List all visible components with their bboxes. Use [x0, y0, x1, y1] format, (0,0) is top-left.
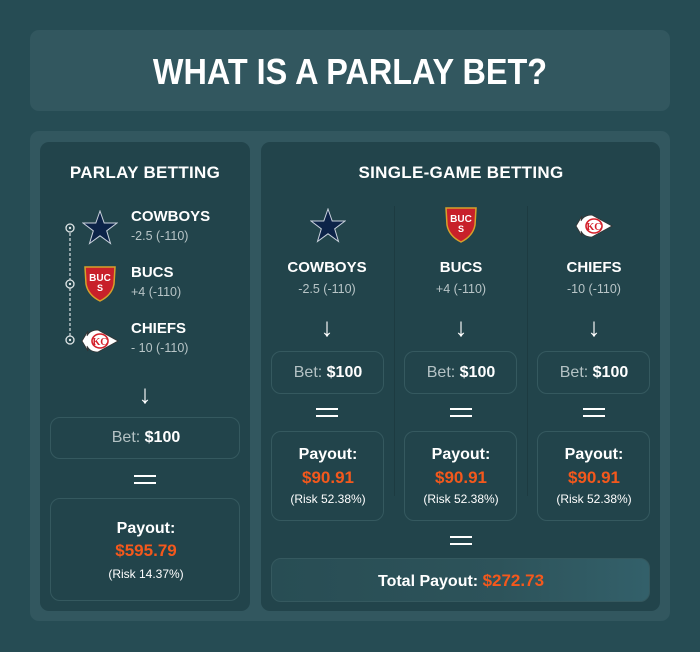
heading: single-game betting: SINGLE-GAME BETTING — [359, 163, 563, 182]
container — [30, 131, 670, 621]
column: bucs: +4 (-110) — [436, 282, 486, 296]
column: bucs: (Risk 52.38%) — [423, 492, 499, 506]
heading: parlay betting: PARLAY BETTING — [70, 163, 220, 182]
title banner — [30, 30, 670, 111]
equals — [450, 536, 472, 545]
icon: chiefs: KC — [586, 222, 602, 233]
text: bucs: +4 (-110) — [131, 285, 181, 299]
column: cowboys: COWBOYS — [287, 259, 367, 276]
payout box: (Risk 14.37%) — [108, 567, 184, 581]
column: chiefs: Bet: $100 — [560, 364, 628, 381]
bet box: Bet: $100 — [112, 429, 180, 446]
column: bucs: ↓ — [454, 312, 468, 342]
icon: chiefs arrowhead — [82, 330, 118, 352]
text: bucs — [131, 264, 181, 299]
icon: chiefs arrowhead: KC — [92, 337, 108, 348]
icon: star — [310, 208, 346, 243]
payout box: Payout: — [117, 520, 175, 537]
column: cowboys: Bet: $100 — [294, 364, 362, 381]
icon: bucs — [445, 207, 477, 243]
text: bucs: BUCS — [131, 264, 174, 281]
column: chiefs: $90.91 — [568, 468, 620, 487]
column: bucs — [404, 207, 517, 521]
text: cowboys: COWBOYS — [131, 208, 210, 225]
column: bucs: Bet: $100 — [427, 364, 495, 381]
icon: cowboys star — [82, 210, 118, 245]
bet box — [50, 417, 240, 459]
icon: chiefs — [576, 214, 612, 238]
column: cowboys: -2.5 (-110) — [298, 282, 356, 296]
text: chiefs — [131, 320, 188, 355]
icon: bucs shield — [84, 266, 116, 302]
column: bucs: BUCS — [440, 259, 482, 276]
column: bucs: Payout: — [432, 446, 490, 463]
payout box — [50, 498, 240, 601]
payout box: $595.79 — [115, 541, 177, 560]
title: WHAT IS A PARLAY BET? — [153, 51, 547, 92]
column: chiefs: ↓ — [588, 312, 600, 342]
panel: parlay betting — [40, 142, 250, 611]
column: cowboys — [271, 208, 384, 521]
arrow: ↓ — [138, 379, 152, 409]
icon: bucs shield: S — [97, 283, 103, 293]
text: chiefs: CHIEFS — [131, 320, 186, 337]
equals — [134, 475, 156, 484]
text: chiefs: - 10 (-110) — [131, 341, 188, 355]
column: chiefs: Payout: — [565, 446, 623, 463]
column: cowboys: ↓ — [320, 312, 334, 342]
column: cowboys: Payout: — [299, 446, 357, 463]
icon: bucs shield: BUC — [89, 273, 111, 284]
timeline — [65, 223, 75, 345]
icon: bucs: BUC — [450, 214, 472, 225]
column: bucs: $90.91 — [435, 468, 487, 487]
text: cowboys — [131, 208, 210, 243]
column: chiefs: -10 (-110) — [567, 282, 621, 296]
total payout bar: Total Payout: $272.73 — [378, 571, 544, 590]
column: chiefs — [537, 214, 650, 521]
panel: single-game betting — [261, 142, 660, 611]
column: chiefs: CHIEFS — [566, 259, 622, 276]
total payout bar — [271, 558, 650, 602]
text: cowboys: -2.5 (-110) — [131, 229, 188, 243]
column: chiefs: (Risk 52.38%) — [556, 492, 632, 506]
icon: bucs: S — [458, 224, 464, 234]
column: cowboys: (Risk 52.38%) — [290, 492, 366, 506]
column: cowboys: $90.91 — [302, 468, 354, 487]
